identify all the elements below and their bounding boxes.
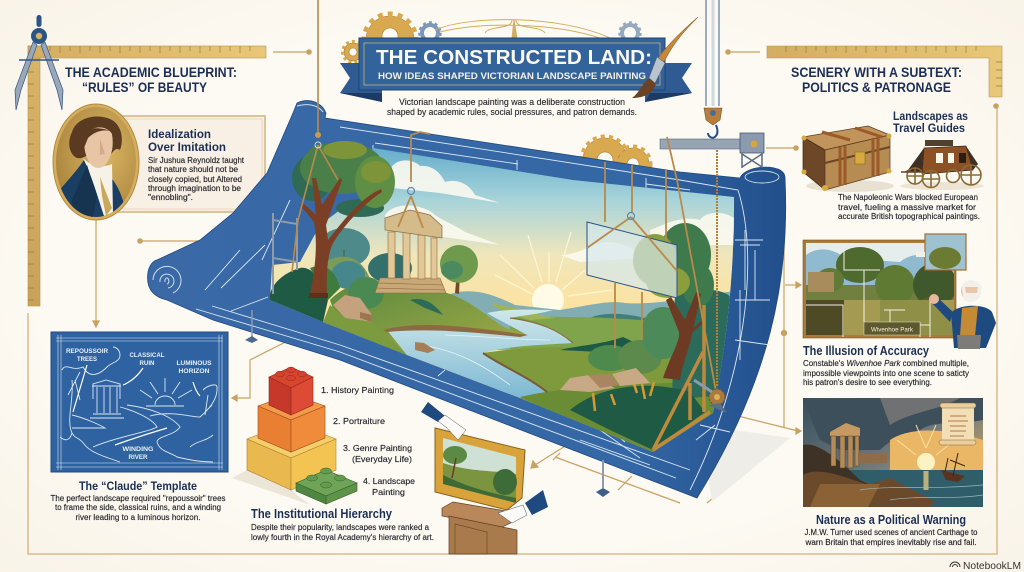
crane bbox=[660, 0, 764, 168]
chart labels: hierarchy levels: 3. Genre Painting bbox=[343, 443, 412, 453]
crane beam bbox=[660, 139, 740, 149]
body text: reynolds: that nature should not be bbox=[148, 165, 239, 174]
right roll bbox=[745, 171, 779, 183]
hand bottom bbox=[498, 490, 548, 523]
chart labels: hierarchy levels: Painting bbox=[372, 487, 405, 497]
heading: landscapes as travel guides: Travel Guides bbox=[893, 121, 965, 135]
blueprint labels: REPOUSSOIR bbox=[66, 348, 108, 355]
river bbox=[387, 310, 573, 398]
heading: idealization bbox=[148, 127, 226, 154]
rocks bbox=[560, 368, 650, 392]
sky panel and ropes bbox=[292, 0, 727, 450]
blueprint grid lines bbox=[196, 127, 770, 490]
glass panel bbox=[587, 222, 677, 298]
body text: institutional hierarchy: Despite their popularity, landscapes were ranked a bbox=[251, 523, 430, 532]
blueprint labels: LUMINOUS bbox=[176, 360, 212, 367]
section heading: scenery: POLITICS & PATRONAGE bbox=[802, 80, 951, 95]
body text: Turner: J.M.W. Turner used scenes of ancient Carthage to bbox=[804, 528, 978, 537]
heading: political warning: Nature as a Political Warning bbox=[816, 513, 966, 527]
painting: idealized landscape bbox=[270, 148, 734, 452]
blueprint labels: RIVER bbox=[128, 454, 148, 461]
right bushes bbox=[560, 290, 732, 400]
blueprint labels: HORIZON bbox=[178, 368, 210, 375]
right bank bbox=[484, 341, 725, 452]
blueprint labels: TREES bbox=[77, 356, 97, 363]
icon: Constable patron figure bbox=[929, 280, 996, 349]
frame line bbox=[28, 106, 997, 554]
body text: illusion bbox=[803, 359, 969, 387]
ship bbox=[941, 453, 965, 482]
heading: idealization: Over Imitation bbox=[148, 140, 226, 154]
body text: Turner bbox=[804, 528, 978, 547]
distant hills bbox=[445, 290, 740, 350]
puzzle piece bbox=[916, 234, 966, 270]
body text: reynolds: Sir Jushua Reynoldz taught bbox=[148, 156, 245, 165]
body text: institutional hierarchy bbox=[251, 523, 434, 542]
hand top bbox=[421, 402, 466, 440]
icon: top gears bbox=[342, 14, 640, 66]
body text: illusion: Constable's Wivenhoe Park combined multiple, bbox=[803, 359, 969, 368]
body text: Claude template: river leading to a luminous horizon. bbox=[76, 513, 200, 522]
decorative arch bbox=[435, 20, 610, 38]
body text: Claude template bbox=[50, 494, 226, 522]
heading: idealization: Idealization bbox=[148, 127, 211, 141]
icon: compass bbox=[15, 15, 63, 110]
intro text: Victorian landscape painting was a deliberate construction bbox=[399, 97, 625, 107]
body text: travel bbox=[838, 193, 980, 221]
temple ruin bbox=[375, 210, 446, 293]
chart labels: hierarchy levels: 2. Portraiture bbox=[333, 416, 385, 426]
body text: illusion: impossible viewpoints into one scene to saticty bbox=[803, 369, 969, 378]
chart: lego hierarchy bbox=[232, 367, 357, 505]
chart labels: hierarchy levels bbox=[321, 385, 415, 497]
puzzle cuts bbox=[806, 243, 930, 337]
section heading: scenery: SCENERY WITH A SUBTEXT: bbox=[791, 65, 962, 80]
icon: framed painting on pedestal bbox=[421, 402, 548, 554]
crane ropes bbox=[706, 0, 719, 106]
wooden A-frame bbox=[653, 305, 710, 450]
Wivenhoe label bbox=[864, 322, 920, 335]
left hill bbox=[330, 285, 530, 355]
chart labels: hierarchy levels: 1. History Painting bbox=[321, 385, 394, 395]
icon: mid gears bbox=[582, 137, 650, 183]
section heading: scenery bbox=[791, 65, 962, 95]
intro text: shaped by academic rules, social pressures, and patron demands. bbox=[387, 107, 637, 117]
river rock bbox=[415, 342, 435, 353]
body text: institutional hierarchy: lowly fourth in the Royal Academy's hierarchy of art. bbox=[251, 533, 434, 542]
title: THE CONSTRUCTED LAND: bbox=[376, 47, 652, 69]
ruler: right bbox=[767, 46, 1002, 97]
frame bbox=[435, 428, 525, 510]
hill bushes bbox=[318, 228, 443, 315]
logo: NotebookLM: NotebookLM bbox=[963, 561, 1021, 572]
chart labels: hierarchy levels: 4. Landscape bbox=[363, 476, 415, 486]
chart labels: hierarchy levels: (Everyday Life) bbox=[352, 454, 412, 464]
body text: Claude template: to frame the side, classical ruins, and a winding bbox=[55, 503, 221, 512]
heading: landscapes as travel guides: Landscapes as bbox=[893, 109, 968, 123]
ruin bbox=[830, 423, 887, 468]
Wivenhoe label: Wivenhoe Park bbox=[871, 326, 914, 334]
body text: reynolds: "ennobling". bbox=[148, 193, 193, 202]
body text: reynolds bbox=[148, 156, 245, 202]
blueprint labels bbox=[66, 348, 212, 461]
section heading: academic blueprint bbox=[65, 65, 237, 95]
icon: portrait of Reynolds bbox=[53, 104, 139, 222]
heading: landscapes as travel guides bbox=[893, 109, 968, 135]
section heading: academic blueprint: “RULES” OF BEAUTY bbox=[82, 80, 207, 95]
body text: Turner: warn Britain that empires inevitably rise and fail. bbox=[804, 538, 976, 547]
blueprint sheet bbox=[148, 101, 790, 502]
pedestal bbox=[442, 502, 517, 554]
heading: Claude template: The “Claude” Template bbox=[79, 479, 197, 493]
title banner bbox=[340, 38, 692, 102]
mid fields bbox=[510, 316, 644, 350]
icon: paintbrush bbox=[632, 17, 698, 98]
icon: trunk bbox=[802, 126, 894, 192]
right tree bbox=[633, 223, 714, 380]
scroll bbox=[939, 403, 976, 445]
painting: puzzle Wivenhoe Park bbox=[803, 234, 966, 338]
body text: reynolds: through imagination to be bbox=[148, 184, 242, 193]
connector lines bbox=[93, 50, 998, 503]
left roll spiral bbox=[153, 105, 323, 293]
left rocks bbox=[333, 295, 372, 322]
hook bbox=[708, 125, 717, 138]
framed scene bbox=[443, 438, 517, 503]
body text: reynolds: closely copied, but Altered bbox=[148, 175, 242, 184]
body text: travel: The Napoleonic Wars blocked European bbox=[838, 193, 978, 202]
pulley bbox=[704, 108, 722, 125]
body text: travel: accurate British topographical paintings. bbox=[838, 212, 980, 221]
ruler: left bbox=[28, 46, 266, 306]
heading: institutional hierarchy: The Institutional Hierarchy bbox=[251, 507, 392, 521]
panel: Claude template blueprint bbox=[51, 332, 228, 472]
vertical ropes bbox=[605, 137, 717, 397]
subtitle: HOW IDEAS SHAPED VICTORIAN LANDSCAPE PAINTING bbox=[378, 71, 646, 82]
painting: Turner Carthage bbox=[803, 398, 983, 507]
rope glass bbox=[587, 217, 677, 271]
clouds bbox=[385, 160, 734, 262]
blueprint labels: CLASSICAL bbox=[130, 352, 164, 359]
rope left bbox=[292, 0, 338, 272]
block: yellow bbox=[247, 422, 336, 490]
intro text bbox=[387, 97, 637, 117]
left foreground bushes bbox=[270, 266, 407, 355]
panel: idealization card bbox=[118, 116, 265, 212]
small mid tree bbox=[440, 245, 478, 294]
blueprint labels: WINDING bbox=[122, 446, 154, 453]
sun bbox=[495, 232, 612, 316]
foreground plants bbox=[570, 386, 705, 450]
rope temple bbox=[398, 132, 430, 228]
body text: travel: travel, fueling a massive market for bbox=[838, 203, 976, 212]
blueprint labels: RUIN bbox=[140, 360, 155, 367]
left tree bbox=[292, 141, 395, 298]
block: orange bbox=[258, 394, 325, 452]
icon: stagecoach bbox=[900, 140, 984, 190]
ladder bbox=[245, 213, 297, 343]
block: red bbox=[269, 367, 313, 415]
section heading: academic blueprint: THE ACADEMIC BLUEPRINT: bbox=[65, 65, 237, 80]
winch bbox=[694, 380, 727, 413]
support post bbox=[596, 460, 610, 497]
heading: illusion of accuracy: The Illusion of Accuracy bbox=[803, 344, 929, 358]
block: green bbox=[296, 468, 357, 504]
body text: Claude template: The perfect landscape required "repoussoir" trees bbox=[50, 494, 226, 503]
rope crane bbox=[716, 150, 718, 387]
ribbon tails bbox=[340, 63, 692, 102]
body text: illusion: his patron's desire to see everything. bbox=[803, 378, 932, 387]
